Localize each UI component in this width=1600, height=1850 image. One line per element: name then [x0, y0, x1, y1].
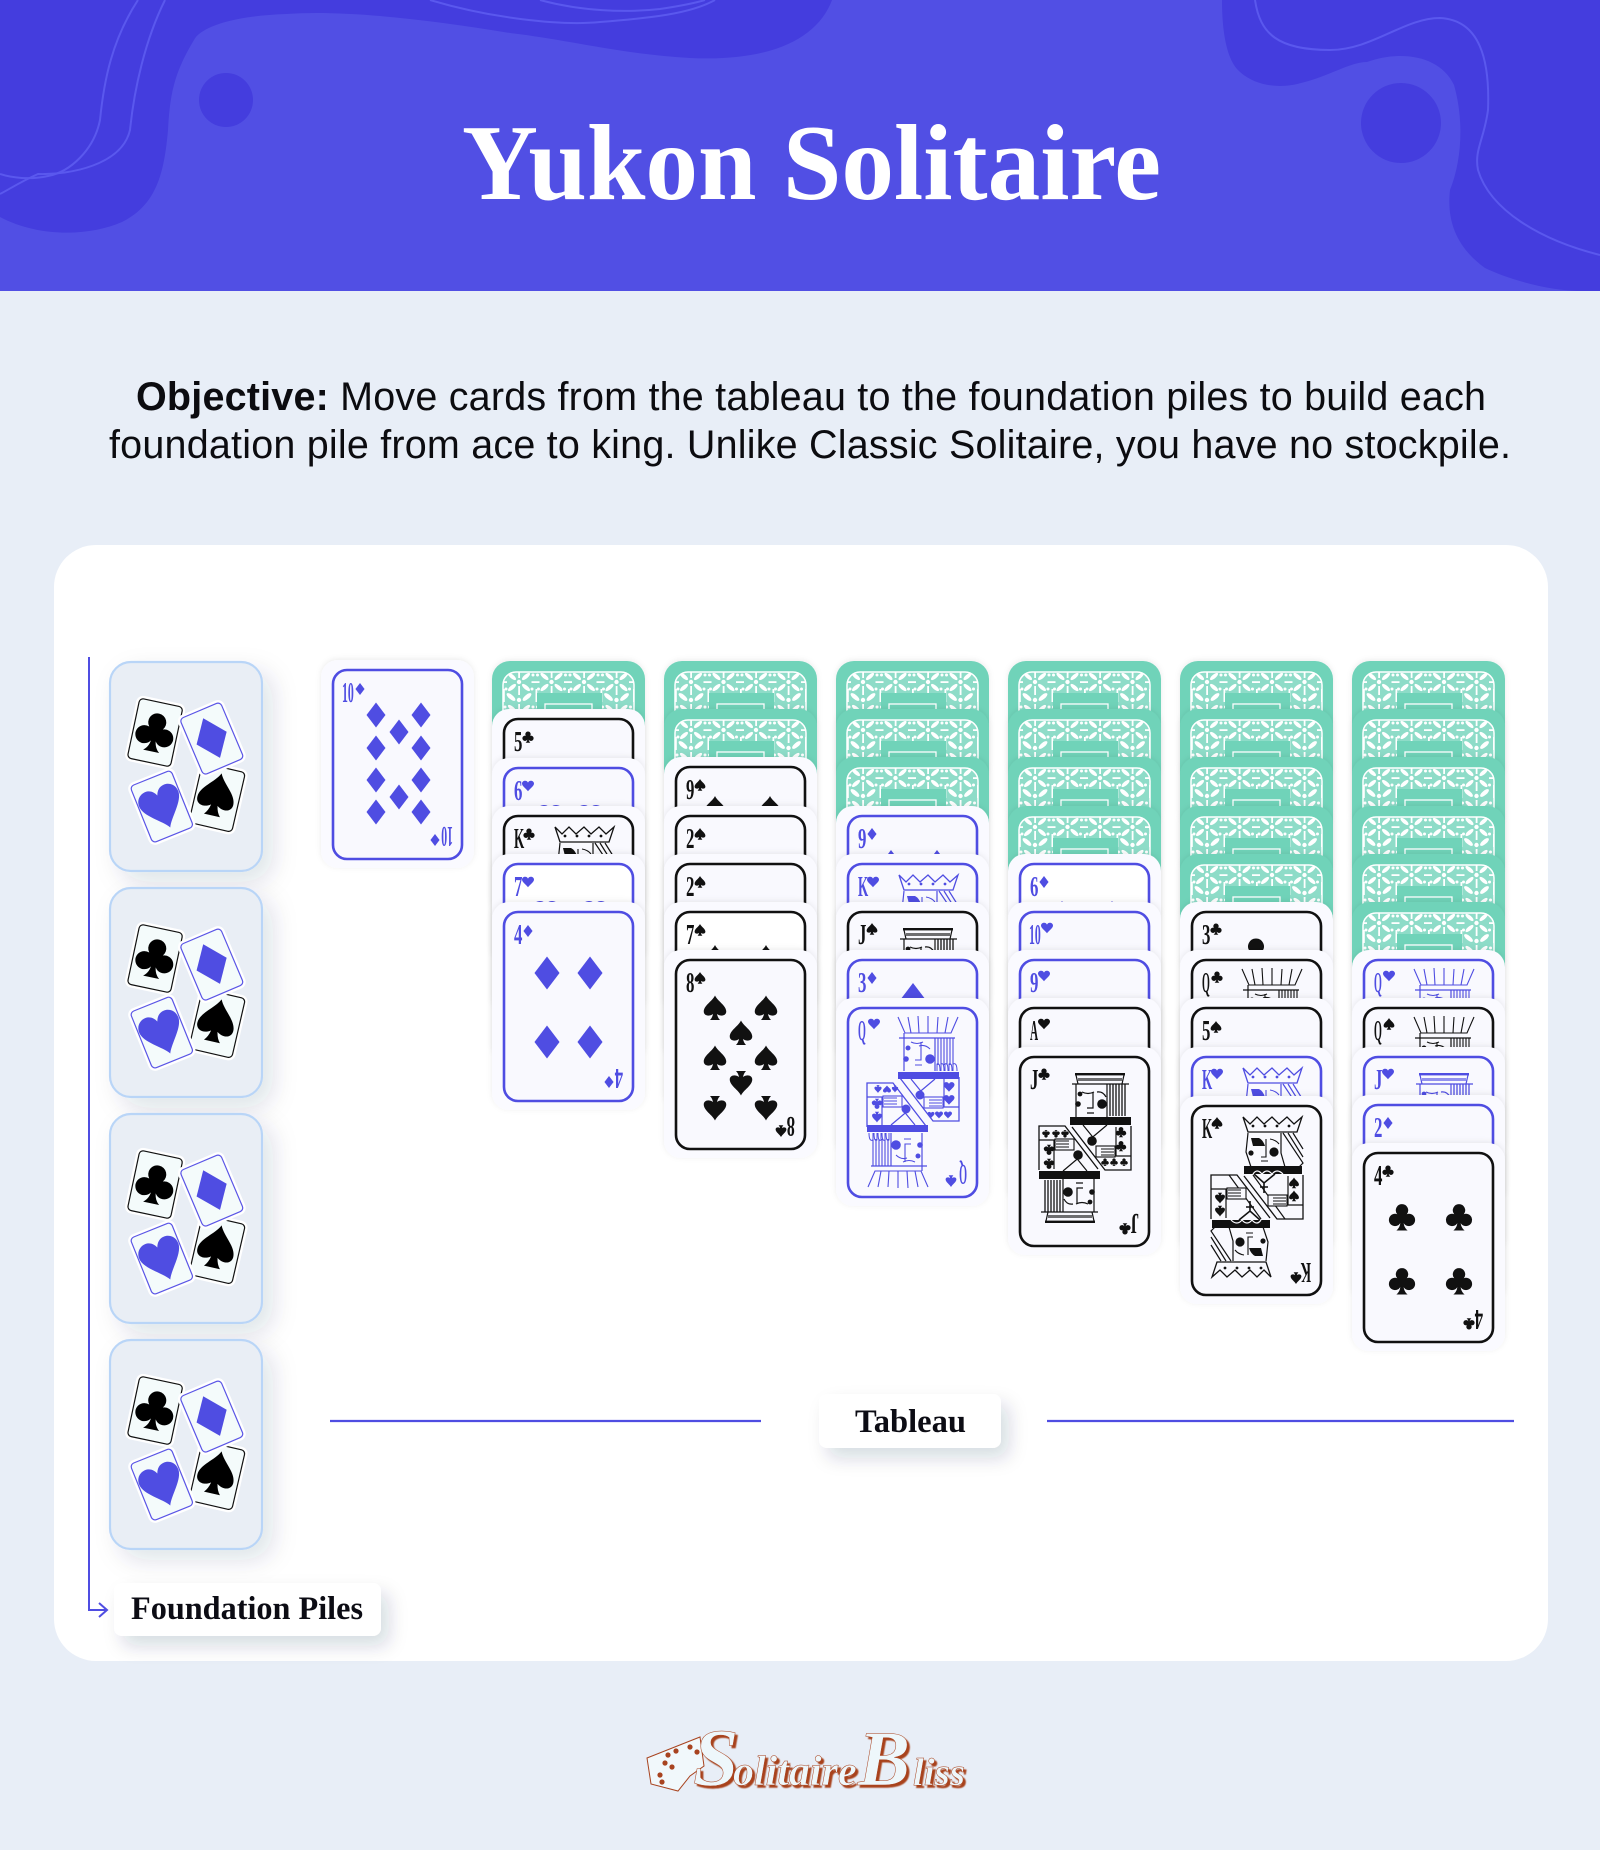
card: 7 of spades: 7 [686, 919, 694, 950]
icon: card fan [647, 1737, 704, 1791]
card: queen of hearts: Q [858, 1015, 866, 1047]
header banner [0, 0, 1600, 291]
logo: Solitaire Bliss: S [693, 1712, 739, 1803]
card: 9 of hearts: 9 [1030, 967, 1038, 998]
card: king of hearts: K [1202, 1065, 1212, 1095]
foundation piles label: Foundation Piles [131, 1591, 363, 1627]
face-down card [1008, 661, 1161, 781]
card: 6 of diamonds: 6 [1030, 871, 1038, 902]
face-down card [836, 709, 989, 829]
face-down card [1352, 709, 1505, 829]
logo: Solitaire Bliss [647, 1712, 965, 1803]
card: 3 of clubs: 3 [1202, 919, 1210, 950]
face-down card [1008, 806, 1161, 926]
face-down card [836, 757, 989, 877]
objective text: Objective: Move cards from the tableau to the foundation piles to build each [136, 375, 1486, 419]
card: king of hearts [836, 854, 989, 1062]
card: king of hearts: K [858, 872, 868, 902]
tableau column 1 [492, 661, 645, 1110]
card: king of hearts [1180, 1047, 1333, 1255]
face-down card [1180, 709, 1333, 829]
card: 5 of clubs: 5 [514, 726, 522, 757]
face-down card [664, 709, 817, 829]
face-down card [1352, 854, 1505, 974]
card: 4 of clubs: 4 [1374, 1160, 1383, 1191]
card: jack of clubs: J [1030, 1064, 1038, 1095]
card: 2 of spades [664, 806, 817, 1014]
waste card: 10 of diamonds: 10 [441, 820, 453, 852]
tableau divider and label: Tableau [855, 1404, 966, 1440]
card: 4 of clubs: 4 [1474, 1304, 1483, 1335]
face-down card [1352, 757, 1505, 877]
card: 2 of diamonds [1352, 1095, 1505, 1303]
face-down card [836, 661, 989, 781]
card: 9 of spades: 9 [686, 774, 694, 805]
card: 4 of diamonds: 4 [514, 919, 523, 950]
card: 8 of spades [664, 950, 817, 1158]
card: jack of clubs [1008, 1047, 1161, 1255]
card: 4 of diamonds [492, 902, 645, 1110]
card: 8 of spades: 8 [787, 1111, 795, 1142]
card: queen of hearts: Q [1374, 967, 1382, 999]
waste card: 10 of diamonds: 10 [342, 677, 354, 709]
card: 7 of hearts: 7 [514, 871, 522, 902]
card: ace of spades: A [1030, 1015, 1038, 1047]
face-down card [1180, 806, 1333, 926]
face-down card [1008, 757, 1161, 877]
card: 3 of clubs [1180, 902, 1333, 1110]
card: 9 of spades [664, 757, 817, 965]
face-down card [1352, 806, 1505, 926]
card: queen of spades [1352, 998, 1505, 1206]
face-down card [664, 661, 817, 781]
card: jack of spades: J [858, 919, 866, 950]
foundation pile 1 [110, 662, 262, 871]
card: 5 of spades: 5 [1202, 1015, 1210, 1046]
tableau column 3 [836, 661, 989, 1206]
card: 7 of hearts [492, 854, 645, 1062]
card: 4 of diamonds: 4 [614, 1063, 623, 1094]
card: queen of clubs [1180, 950, 1333, 1158]
card: 5 of spades [1180, 998, 1333, 1206]
face-down card [1180, 661, 1333, 781]
card: queen of spades: Q [1374, 1015, 1382, 1047]
card: 5 of clubs [492, 709, 645, 917]
face-down card [492, 661, 645, 781]
card: 2 of spades [664, 854, 817, 1062]
card: jack of spades [836, 902, 989, 1110]
card: king of spades [1180, 1096, 1333, 1304]
card: 2 of spades: 2 [686, 871, 694, 902]
face-down card [1180, 757, 1333, 877]
title: Yukon Solitaire [462, 104, 1161, 223]
card: 6 of hearts: 6 [514, 775, 522, 806]
foundation piles label [114, 1583, 381, 1636]
card: 2 of spades: 2 [686, 823, 694, 854]
logo: Solitaire Bliss: olitaire [733, 1749, 857, 1795]
foundation pile 4 [110, 1340, 262, 1549]
card: queen of clubs: Q [1202, 967, 1210, 999]
face-down card [1352, 661, 1505, 781]
panel: game board [54, 545, 1548, 1661]
card: 10 of hearts: 10 [1029, 919, 1041, 951]
card: king of spades: K [1301, 1257, 1311, 1287]
foundation bracket arrow [89, 657, 107, 1617]
card: 7 of spades [664, 902, 817, 1110]
foundation pile 3 [110, 1114, 262, 1323]
face-down card [1180, 854, 1333, 974]
card: 9 of diamonds: 9 [858, 823, 866, 854]
card: queen of hearts [1352, 950, 1505, 1158]
tableau column 2 [664, 661, 817, 1158]
foundation pile 2 [110, 888, 262, 1097]
face-down card [1352, 902, 1505, 1022]
card: jack of clubs: J [1131, 1208, 1139, 1239]
card: 4 of clubs [1352, 1143, 1505, 1351]
objective text [109, 375, 1511, 467]
waste card: 10 of diamonds [321, 660, 474, 868]
card: 3 of diamonds [836, 950, 989, 1158]
card: jack of hearts: J [1374, 1064, 1382, 1095]
card: ace of spades [1008, 998, 1161, 1206]
card: 2 of diamonds: 2 [1374, 1112, 1382, 1143]
card: king of clubs: K [514, 824, 524, 854]
card: king of spades: K [1202, 1114, 1212, 1144]
objective text: foundation pile from ace to king. Unlike Classic Solitaire, you have no stockpile. [109, 423, 1511, 467]
tableau column 4 [1008, 661, 1161, 1255]
logo: Solitaire Bliss: liss [913, 1751, 965, 1794]
card: 8 of spades: 8 [686, 967, 694, 998]
tableau divider and label [330, 1394, 1514, 1448]
card: queen of hearts: Q [959, 1158, 967, 1190]
card: 10 of hearts [1008, 902, 1161, 1110]
card: jack of hearts [1352, 1047, 1505, 1255]
logo: Solitaire Bliss: B [857, 1715, 910, 1802]
face-down card [1008, 709, 1161, 829]
card: 6 of hearts [492, 758, 645, 966]
tableau column 6 [1352, 661, 1505, 1351]
card: king of clubs [492, 806, 645, 1014]
card: 6 of diamonds [1008, 854, 1161, 1062]
card: 3 of diamonds: 3 [858, 967, 866, 998]
card: queen of hearts [836, 998, 989, 1206]
card: 9 of hearts [1008, 950, 1161, 1158]
tableau column 5 [1180, 661, 1333, 1304]
card: 9 of diamonds [836, 806, 989, 1014]
